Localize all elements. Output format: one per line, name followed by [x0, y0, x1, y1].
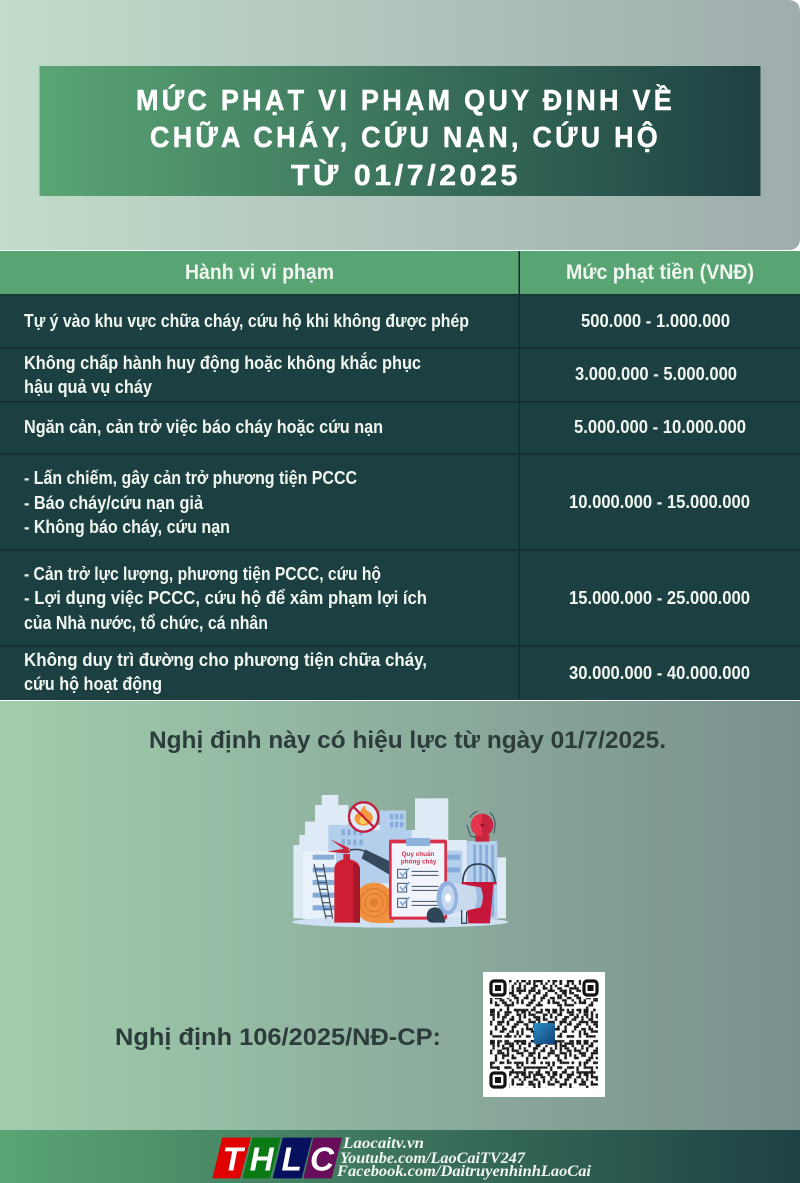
row 6: 30.000.000 - 40.000.000	[569, 663, 750, 683]
panel: title banner	[40, 66, 760, 196]
table header: Mức phạt tiền (VNĐ)	[566, 261, 754, 284]
ladder	[314, 864, 333, 919]
fire hose roll	[354, 883, 394, 923]
row 5: - Lợi dụng việc PCCC, cứu hộ để xâm phạm lợi ích	[24, 588, 427, 608]
megaphone	[427, 881, 483, 923]
ground ellipse	[292, 916, 508, 928]
row 5: của Nhà nước, tổ chức, cá nhân	[24, 613, 268, 633]
QR code	[483, 972, 605, 1097]
row 6: cứu hộ hoạt động	[24, 674, 162, 694]
panel: title banner: MỨC PHẠT VI PHẠM QUY ĐỊNH VỀ	[136, 83, 675, 117]
THLC logo	[212, 1138, 342, 1178]
alarm bell	[467, 811, 495, 842]
table header	[0, 251, 800, 294]
fire extinguisher	[327, 839, 394, 923]
footer bar	[0, 1130, 800, 1183]
panel: lower background	[0, 701, 800, 1131]
illustration: fire safety regulations	[292, 795, 508, 928]
city skyline	[293, 795, 506, 918]
row 6: Không duy trì đường cho phương tiện chữa cháy,	[24, 650, 427, 670]
row 4	[24, 468, 750, 537]
row 2: hậu quả vụ cháy	[24, 377, 152, 397]
THLC logo: H	[250, 1141, 275, 1178]
row 3: Ngăn cản, cản trở việc báo cháy hoặc cứu nạn	[24, 417, 383, 437]
panel: title banner: CHỮA CHÁY, CỨU NẠN, CỨU HỘ	[150, 120, 661, 154]
decree label: Nghị định 106/2025/NĐ-CP:	[115, 1024, 441, 1051]
row 4: 10.000.000 - 15.000.000	[569, 492, 750, 512]
panel: title banner: TỪ 01/7/2025	[291, 158, 521, 192]
THLC logo: T	[222, 1141, 245, 1178]
row 1: Tự ý vào khu vực chữa cháy, cứu hộ khi không được phép	[24, 311, 469, 331]
no-fire sign	[349, 802, 378, 832]
row 2: Không chấp hành huy động hoặc không khắc phục	[24, 352, 421, 373]
THLC logo: L	[281, 1141, 302, 1178]
footer links: Laocaitv.vn	[342, 1135, 424, 1152]
footer links	[336, 1135, 592, 1180]
row 1: 500.000 - 1.000.000	[581, 311, 730, 331]
checklist clipboard: phòng cháy	[401, 859, 437, 866]
row 2	[24, 352, 737, 397]
panel: penalty table	[0, 251, 800, 700]
row 5: - Cản trở lực lượng, phương tiện PCCC, cứu hộ	[24, 564, 381, 584]
footer links: Youtube.com/LaoCaiTV247	[340, 1150, 526, 1167]
table header: Hành vi vi phạm	[185, 261, 334, 284]
checklist clipboard: Quy chuẩn	[402, 850, 434, 858]
row 2: 3.000.000 - 5.000.000	[575, 364, 737, 384]
footer links: Facebook.com/DaitruyenhinhLaoCai	[336, 1163, 592, 1180]
row 4: - Không báo cháy, cứu nạn	[24, 517, 230, 537]
row 3: 5.000.000 - 10.000.000	[574, 417, 746, 437]
red bucket	[462, 864, 497, 923]
effective date note: Nghị định này có hiệu lực từ ngày 01/7/2025.	[149, 727, 666, 754]
row 4: - Lấn chiếm, gây cản trở phương tiện PCCC	[24, 468, 357, 488]
row 4: - Báo cháy/cứu nạn giả	[24, 493, 204, 513]
panel: header background	[0, 0, 800, 250]
row 3	[24, 417, 746, 437]
row 5	[24, 564, 750, 633]
checklist clipboard	[389, 838, 447, 920]
THLC logo: C	[310, 1141, 335, 1178]
row 6	[24, 650, 750, 694]
row 5: 15.000.000 - 25.000.000	[569, 588, 750, 608]
